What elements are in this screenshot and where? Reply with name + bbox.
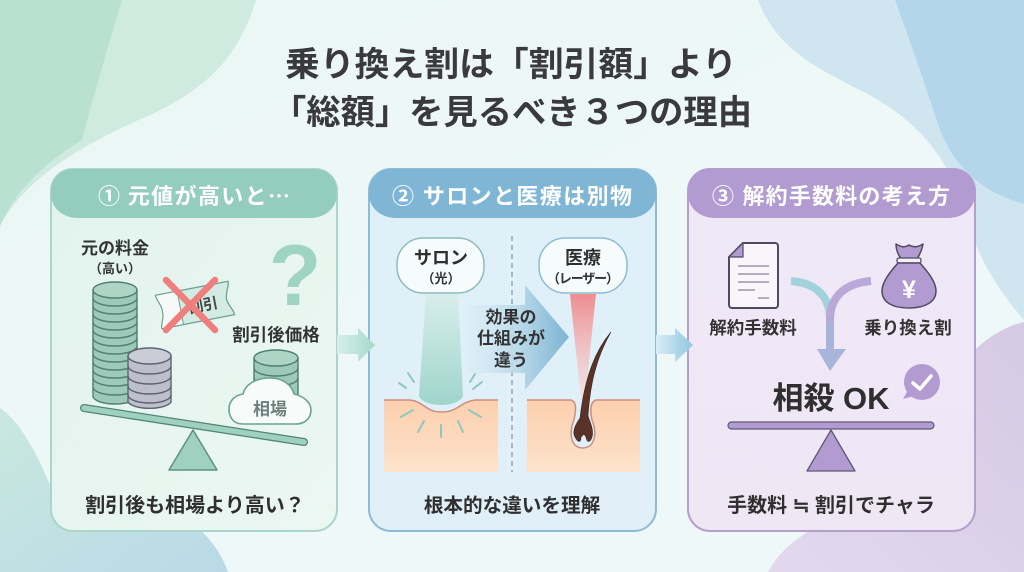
panel: salon vs medical: [369, 169, 656, 531]
pill: medical: [539, 238, 627, 293]
icon: medical laser beam: [570, 294, 596, 400]
pill: salon: [397, 238, 484, 293]
panel 1 header: [51, 169, 337, 218]
label: original price: 元の料金: [81, 238, 149, 258]
illustration: hair in follicle: [527, 332, 640, 472]
pill: medical: （レーザー）: [547, 271, 619, 286]
icon: document: [729, 243, 778, 308]
label: cancellation fee: 解約手数料: [709, 318, 797, 338]
arrow: panel 2 to panel 3: [656, 328, 693, 362]
label: discounted price: 割引後価格: [232, 325, 320, 345]
panel: cancellation fee: [688, 169, 975, 531]
panel 2 header: [369, 169, 656, 218]
pill: medical: 医療: [565, 248, 601, 268]
icon: market price cloud: [229, 378, 311, 424]
icon: balanced seesaw: [728, 422, 934, 471]
label: original price: （高い）: [89, 261, 141, 276]
icon: salon light beam: [419, 294, 463, 405]
panel 2 header: ② サロンと医療は別物: [392, 184, 632, 209]
caption: 手数料 ≒ 割引でチャラ: [727, 494, 935, 517]
pill: salon: （光）: [421, 271, 461, 286]
arrow: merging arrows: [791, 281, 871, 371]
icon: tilted seesaw: [84, 408, 304, 470]
arrow: panel 1 to panel 2: [337, 328, 375, 362]
arrow: mechanism differs: 違う: [494, 350, 528, 370]
pill: salon: サロン: [414, 248, 468, 268]
icon: market price cloud: 相場: [253, 400, 287, 419]
label: switching discount: 乗り換え割: [864, 318, 952, 338]
arrow: mechanism differs: 効果の: [486, 308, 536, 327]
icon: crossed-out discount ticket: [155, 280, 235, 330]
icon: yen money bag: [882, 244, 936, 308]
icon: grey coin stack: [128, 348, 171, 408]
panel 1 header: ① 元値が高いと…: [98, 179, 290, 211]
icon: tall coin stack: [93, 282, 137, 404]
icon: question mark: ?: [269, 228, 321, 324]
title: [272, 46, 752, 132]
icon: check bubble: [903, 364, 940, 400]
caption: 根本的な違いを理解: [424, 495, 601, 517]
arrow: mechanism differs: 仕組みが: [477, 328, 545, 348]
panel: high list price: [51, 169, 337, 531]
icon: yen money bag: ¥: [902, 276, 916, 304]
arrow: mechanism differs: [468, 285, 569, 390]
icon: short coin stack: [254, 350, 298, 395]
illustration: salon skin: [384, 373, 498, 472]
divider: [511, 236, 513, 472]
panel 3 header: [688, 169, 975, 218]
icon: crossed-out discount ticket: 割引: [187, 295, 220, 317]
label: original price: [81, 238, 149, 276]
title: 乗り換え割は「割引額」より: [285, 46, 737, 84]
caption: 割引後も相場より高い？: [85, 494, 305, 517]
title: 「総額」を見るべき３つの理由: [272, 94, 752, 132]
panel 3 header: ③ 解約手数料の考え方: [712, 184, 950, 209]
heading: offset OK: 相殺 OK: [772, 381, 890, 416]
